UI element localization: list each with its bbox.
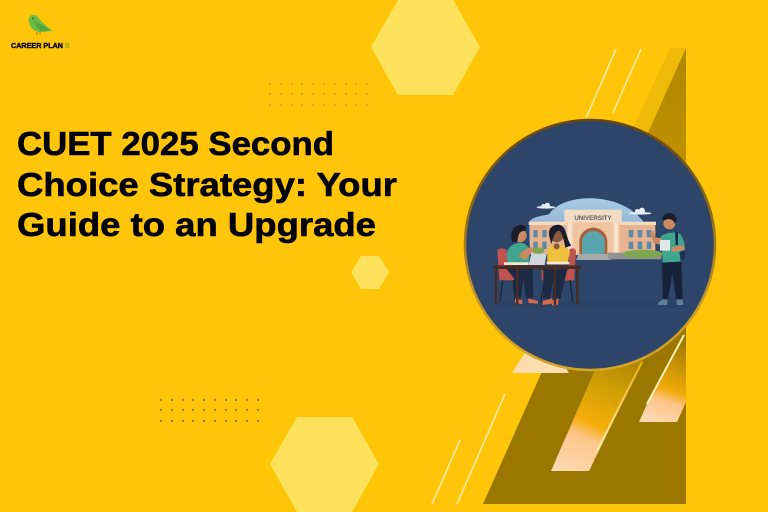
person: standing student — [650, 213, 685, 305]
decorative graphic: slanted shapes — [432, 48, 686, 504]
clouds — [537, 203, 651, 215]
bushes — [532, 247, 663, 258]
peach wedge behind circle — [512, 325, 569, 373]
title: CUET 2025 Second — [17, 125, 334, 162]
logo: Career Plan B — [11, 15, 70, 50]
circular illustration — [465, 120, 715, 370]
steps — [576, 254, 611, 260]
building sign: UNIVERSITY — [574, 215, 612, 222]
title: Choice Strategy: Your — [17, 166, 397, 203]
lighter top band — [625, 48, 686, 150]
logo: Career Plan B: B — [65, 43, 70, 50]
floor shadow — [495, 301, 690, 307]
logo wordmark: CAREER PLAN — [11, 43, 63, 50]
windows — [533, 230, 651, 249]
dot grid: lower — [160, 399, 259, 422]
top shaded triangle — [629, 48, 686, 175]
title: Guide to an Upgrade — [17, 206, 376, 243]
arched entrance — [579, 228, 607, 254]
person: left student — [507, 225, 538, 304]
dark triangle — [483, 48, 686, 504]
title — [17, 125, 397, 243]
gradient stripe right — [639, 330, 686, 422]
chairs — [497, 248, 576, 281]
sky dome — [529, 198, 644, 253]
hexagon: top — [371, 0, 480, 95]
table with laptop — [493, 254, 581, 305]
chair legs — [500, 280, 573, 302]
disc — [465, 120, 715, 370]
thin light line on left stripe — [597, 362, 642, 451]
hexagon: bottom — [270, 417, 379, 512]
university scene — [529, 198, 663, 260]
gradient stripe left — [551, 340, 653, 471]
thin lines top — [586, 49, 616, 118]
thin lines bottom — [457, 394, 505, 504]
hexagon: small centre — [351, 256, 389, 289]
students at table — [493, 225, 581, 306]
icon: green bird — [29, 15, 53, 35]
dot grid: upper — [269, 83, 368, 106]
person: middle student — [543, 225, 571, 306]
thin light line on right stripe — [647, 335, 684, 404]
